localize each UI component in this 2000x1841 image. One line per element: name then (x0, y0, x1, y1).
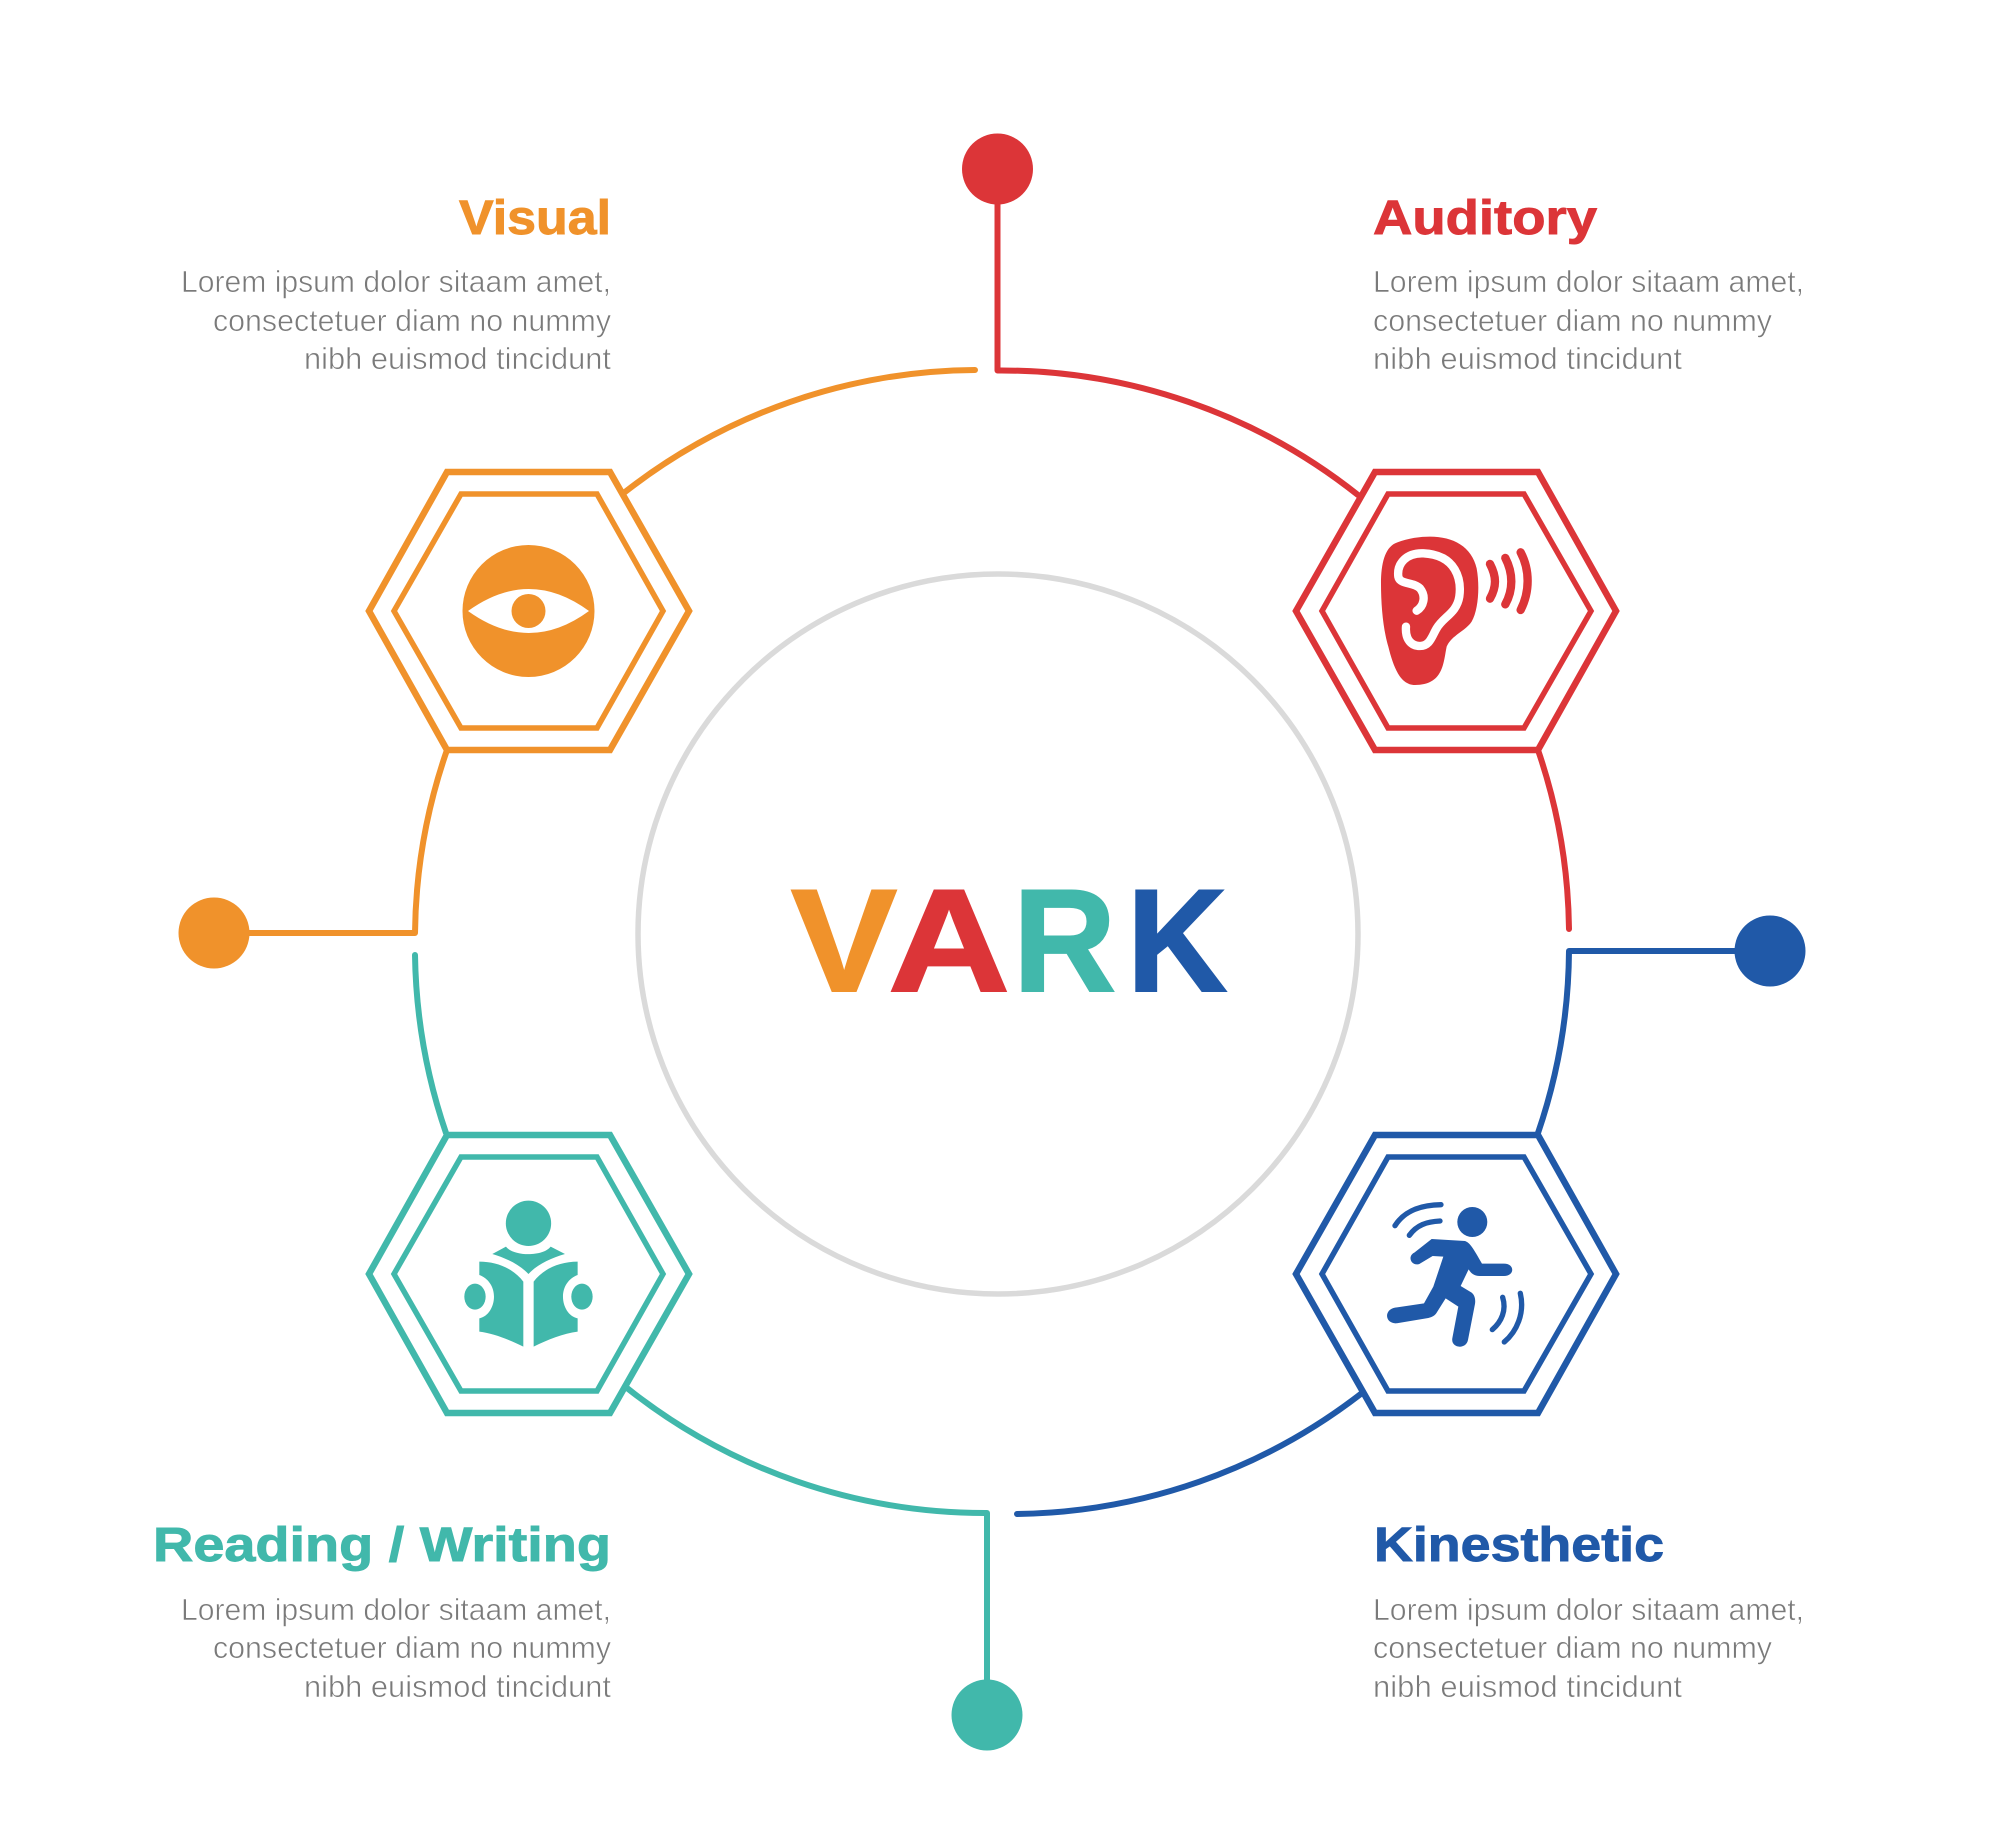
text block: Visual: nibh euismod tincidunt (304, 341, 611, 376)
title: VARK (791, 859, 1227, 1022)
icon: ear (1381, 537, 1528, 685)
center grey circle (638, 574, 1358, 1294)
text block: Reading / Writing: Lorem ipsum dolor sitaam amet, (181, 1592, 611, 1627)
title: VARK: A (888, 859, 1010, 1022)
hexagon: Kinesthetic (1296, 1135, 1616, 1413)
panel: Visual connector (178, 370, 975, 968)
text block: Reading / Writing: Reading / Writing (153, 1519, 611, 1572)
text block: Auditory (1373, 192, 1804, 376)
text block: Kinesthetic: consectetuer diam no nummy (1373, 1630, 1772, 1665)
title: VARK: R (1013, 859, 1116, 1022)
text block: Reading / Writing: nibh euismod tincidunt (304, 1669, 611, 1704)
text block: Auditory: Auditory (1373, 192, 1597, 245)
text block: Kinesthetic: nibh euismod tincidunt (1373, 1669, 1682, 1704)
text block: Visual: Lorem ipsum dolor sitaam amet, (181, 264, 611, 299)
hexagon: Visual (369, 472, 689, 750)
text block: Reading / Writing: consectetuer diam no nummy (213, 1630, 611, 1665)
panel: Auditory connector (962, 134, 1569, 929)
panel: Kinesthetic connector (1017, 916, 1806, 1514)
hexagon: Auditory (1296, 472, 1616, 750)
text block: Auditory: Lorem ipsum dolor sitaam amet, (1373, 264, 1804, 299)
text block: Visual: Visual (459, 192, 611, 245)
text block: Kinesthetic: Kinesthetic (1374, 1519, 1664, 1572)
hexagon: Reading / Writing (369, 1135, 689, 1413)
panel: Reading / Writing connector (415, 955, 1022, 1750)
text block: Kinesthetic: Lorem ipsum dolor sitaam amet, (1373, 1592, 1804, 1627)
title: VARK: V (791, 859, 897, 1022)
text block: Kinesthetic (1373, 1519, 1804, 1704)
icon: eye (462, 545, 594, 677)
text block: Visual (181, 192, 611, 376)
text block: Visual: consectetuer diam no nummy (213, 303, 611, 338)
icon: person reading book (464, 1201, 593, 1347)
icon: running person (1387, 1205, 1522, 1347)
text block: Auditory: nibh euismod tincidunt (1373, 341, 1682, 376)
title: VARK: K (1127, 859, 1227, 1022)
text block: Auditory: consectetuer diam no nummy (1373, 303, 1772, 338)
text block: Reading / Writing (153, 1519, 611, 1704)
